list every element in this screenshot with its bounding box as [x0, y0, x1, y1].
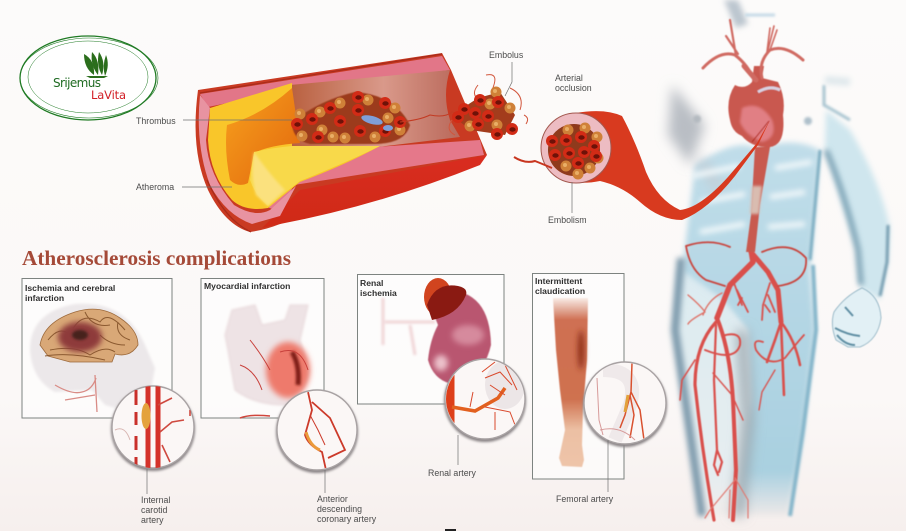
logo [20, 36, 158, 120]
label: femoral artery: Femoral artery [556, 494, 614, 504]
body figure with arteries [668, 0, 890, 520]
cross-section lumen [541, 113, 611, 183]
carotids and subclavians [703, 20, 803, 80]
panel title: infarction [25, 293, 64, 303]
label: internal carotid artery: artery [141, 515, 164, 525]
top wall [200, 56, 450, 107]
underside [262, 155, 487, 228]
label: renal artery: Renal artery [428, 468, 477, 478]
zoom circle: renal artery [444, 359, 526, 442]
label: anterior descending coronary artery [317, 470, 377, 524]
panel: myocardial infarction [201, 278, 324, 418]
shoulders [824, 85, 850, 120]
leg [553, 298, 588, 467]
brain [40, 309, 138, 362]
zoom circle: internal carotid artery [111, 385, 195, 471]
panel title: Intermittent [535, 276, 582, 286]
neck vessels [55, 375, 97, 412]
lower wall [262, 140, 484, 212]
lower arteries [680, 242, 806, 520]
zoom circle: anterior descending coronary artery [276, 390, 358, 473]
kidney [428, 290, 491, 385]
panel title: ischemia [360, 288, 397, 298]
renal vessel [383, 298, 435, 355]
right arm [825, 110, 890, 300]
panel: ischemia and cerebral infarction [22, 278, 172, 418]
skull [30, 304, 155, 412]
label: anterior descending coronary artery: coronary artery [317, 514, 377, 524]
heading: Atherosclerosis complications [22, 246, 291, 270]
artery tail leading from heart [575, 111, 770, 220]
embolism cells [546, 122, 604, 180]
lumen [290, 70, 460, 150]
label: femoral artery [556, 440, 614, 504]
adrenal gland [424, 278, 452, 316]
plaque [250, 146, 380, 206]
embolus cluster [449, 75, 528, 140]
logo rings [20, 36, 158, 120]
label: Thrombus: Thrombus [136, 116, 176, 126]
label: Embolism [548, 182, 587, 225]
logo text: Srijemus [53, 76, 101, 90]
panel title: Myocardial infarction [204, 281, 290, 291]
heart and aorta [703, 20, 803, 252]
thrombus clot [291, 91, 470, 144]
logo leaves [84, 52, 108, 78]
label: internal carotid artery: Internal [141, 495, 170, 505]
label: Arterial occlusion: Arterial [555, 73, 583, 83]
panel title: Renal [360, 278, 383, 288]
label: renal artery [428, 435, 477, 478]
label: anterior descending coronary artery: descending [317, 504, 362, 514]
label: Embolism: Embolism [548, 215, 587, 225]
lumen orange [226, 88, 300, 185]
broken strand [514, 157, 552, 168]
zoom circle: femoral artery [583, 362, 667, 447]
atheroma yellow face [208, 83, 380, 209]
label: Embolus [489, 50, 524, 96]
label: Atheroma: Atheroma [136, 182, 174, 192]
panel title: Ischemia and cerebral [25, 283, 115, 293]
cut-away artery [196, 53, 487, 232]
outer wall [196, 53, 487, 232]
panel: intermittent claudication [532, 274, 624, 479]
artery with embolism cross-section [514, 111, 770, 220]
panel: renal ischemia [358, 274, 504, 404]
label: anterior descending coronary artery: Anterior [317, 494, 348, 504]
dark lumen edge [200, 54, 442, 232]
label: internal carotid artery [141, 469, 170, 525]
label: Arterial occlusion: occlusion [555, 83, 592, 93]
body silhouette shading [668, 0, 890, 516]
label: Embolus: Embolus [489, 50, 524, 60]
bottom edge mark [445, 529, 456, 531]
panel title: claudication [535, 286, 585, 296]
fist [832, 288, 881, 347]
label: Atheroma [136, 182, 232, 192]
cross-section wall [199, 95, 296, 224]
label: internal carotid artery: carotid [141, 505, 168, 515]
logo: LaVita [91, 88, 126, 102]
heart [225, 305, 309, 405]
